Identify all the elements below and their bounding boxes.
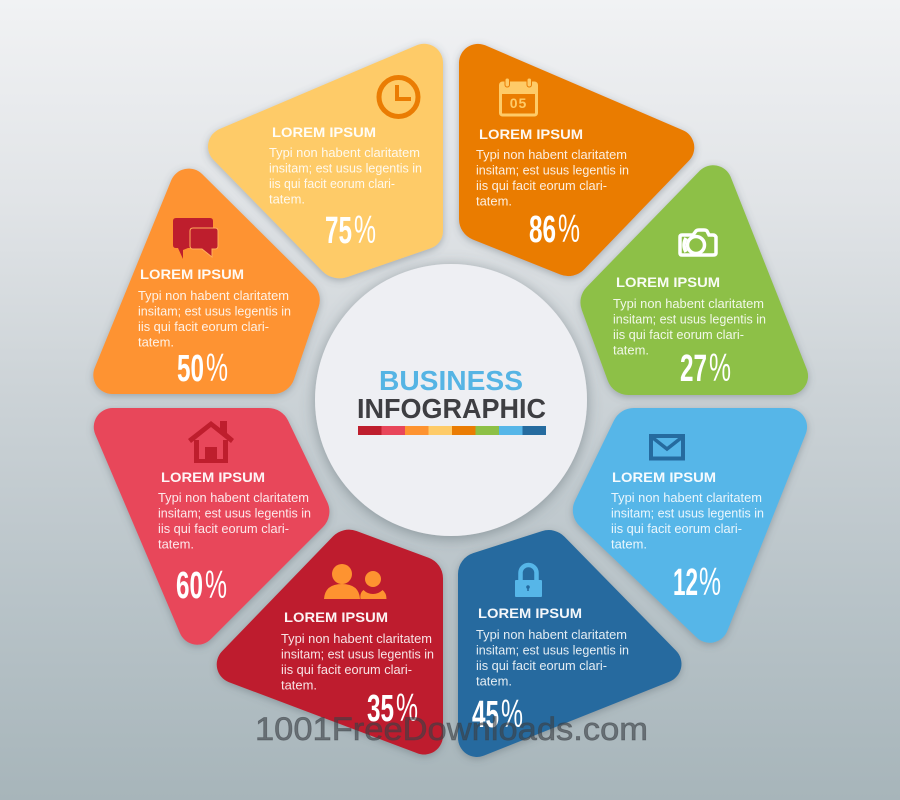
panel: 50% light orange [93, 169, 320, 394]
panel shape: pink [94, 408, 329, 645]
panel shape: dark blue [458, 530, 681, 757]
percentage: 50 [177, 348, 204, 390]
panel shape: red [217, 530, 443, 755]
percentage: 86 [529, 209, 556, 251]
body text: Typi non habent claritatem [138, 288, 289, 303]
body text: Typi non habent claritatem [611, 490, 762, 505]
panel: 12% blue [573, 408, 807, 643]
heading: LOREM IPSUM [478, 605, 582, 621]
body text: tatem. [281, 678, 317, 692]
body text: insitam; est usus legentis in [476, 162, 629, 178]
body text: Typi non habent claritatem [158, 490, 309, 505]
body text [158, 490, 311, 552]
percentage: % [396, 687, 418, 730]
body text: Typi non habent claritatem [269, 145, 420, 160]
icon: clock [379, 78, 418, 116]
percentage: 12 [673, 562, 698, 604]
percentage: 35 [367, 688, 394, 730]
color bar [358, 426, 546, 435]
body text: Typi non habent claritatem [613, 296, 764, 311]
panel: 45% dark blue [458, 530, 681, 757]
panel shape: light orange [93, 169, 320, 394]
body text [611, 490, 764, 552]
body text: tatem. [138, 334, 174, 350]
icon: speech bubbles [173, 218, 218, 259]
body text [269, 145, 422, 206]
body text: insitam; est usus legentis in [611, 506, 764, 520]
percentage: 45 [472, 694, 499, 736]
heading: LOREM IPSUM [272, 124, 376, 140]
body text: tatem. [158, 536, 194, 552]
percentage: % [206, 347, 228, 390]
panel shape: yellow [208, 44, 443, 278]
icon: calendar [500, 78, 537, 115]
body text: insitam; est usus legentis in [476, 642, 629, 658]
body text: iis qui facit eorum clari- [158, 521, 289, 536]
percentage: % [709, 347, 731, 390]
body text: insitam; est usus legentis in [613, 312, 766, 326]
percentage: % [205, 564, 227, 607]
body text: Typi non habent claritatem [281, 631, 432, 646]
heading: LOREM IPSUM [616, 274, 720, 290]
body text: insitam; est usus legentis in [158, 506, 311, 520]
heading: LOREM IPSUM [612, 469, 716, 485]
watermark: 1001FreeDownloads.com [255, 711, 648, 747]
panel: 27% green [580, 165, 808, 395]
percentage: % [558, 208, 580, 251]
percentage: 75 [325, 210, 352, 252]
panel shape: blue [573, 408, 807, 643]
body text: iis qui facit eorum clari- [281, 662, 412, 677]
panel shape: orange [459, 44, 694, 276]
body text: iis qui facit eorum clari- [613, 327, 744, 342]
body text: insitam; est usus legentis in [138, 304, 291, 318]
body text: iis qui facit eorum clari- [138, 319, 269, 334]
body text [138, 288, 291, 350]
body text [613, 296, 766, 358]
icon: camera [680, 230, 716, 255]
heading: LOREM IPSUM [140, 266, 244, 282]
heading: LOREM IPSUM [284, 609, 388, 625]
body text: iis qui facit eorum clari- [611, 521, 742, 536]
panel: 35% red [217, 530, 443, 755]
body text: tatem. [269, 192, 305, 206]
title: business: BUSINESS [379, 365, 523, 396]
panel: 60% pink [94, 408, 329, 645]
icon: padlock [515, 565, 542, 597]
body text: Typi non habent claritatem [476, 627, 627, 642]
body text [476, 627, 629, 688]
panel: 86% orange [459, 44, 694, 276]
body text [281, 631, 434, 692]
icon: house [188, 421, 234, 463]
body text: iis qui facit eorum clari- [269, 176, 395, 191]
body text: tatem. [611, 536, 647, 552]
percentage: % [501, 693, 523, 736]
percentage: 60 [176, 565, 203, 607]
title: infographic: INFOGRAPHIC [357, 393, 546, 424]
body text: iis qui facit eorum clari- [476, 658, 607, 673]
center circle [315, 264, 587, 536]
heading: LOREM IPSUM [479, 126, 583, 142]
panel shape: green [580, 165, 808, 395]
body text [476, 147, 629, 208]
percentage: % [354, 209, 376, 252]
body text: tatem. [476, 194, 512, 208]
icon: envelope [651, 436, 683, 458]
body text: Typi non habent claritatem [476, 147, 627, 162]
body text: insitam; est usus legentis in [269, 160, 422, 176]
percentage: 27 [680, 348, 707, 390]
percentage: % [699, 561, 721, 604]
body text: tatem. [613, 342, 649, 358]
panel: 75% yellow [208, 44, 443, 278]
heading: LOREM IPSUM [161, 469, 265, 485]
circle [315, 264, 587, 536]
icon: calendar: 05 [510, 95, 527, 111]
body text: insitam; est usus legentis in [281, 646, 434, 662]
icon: people [324, 564, 386, 599]
body text: iis qui facit eorum clari- [476, 178, 607, 193]
body text: tatem. [476, 674, 512, 688]
